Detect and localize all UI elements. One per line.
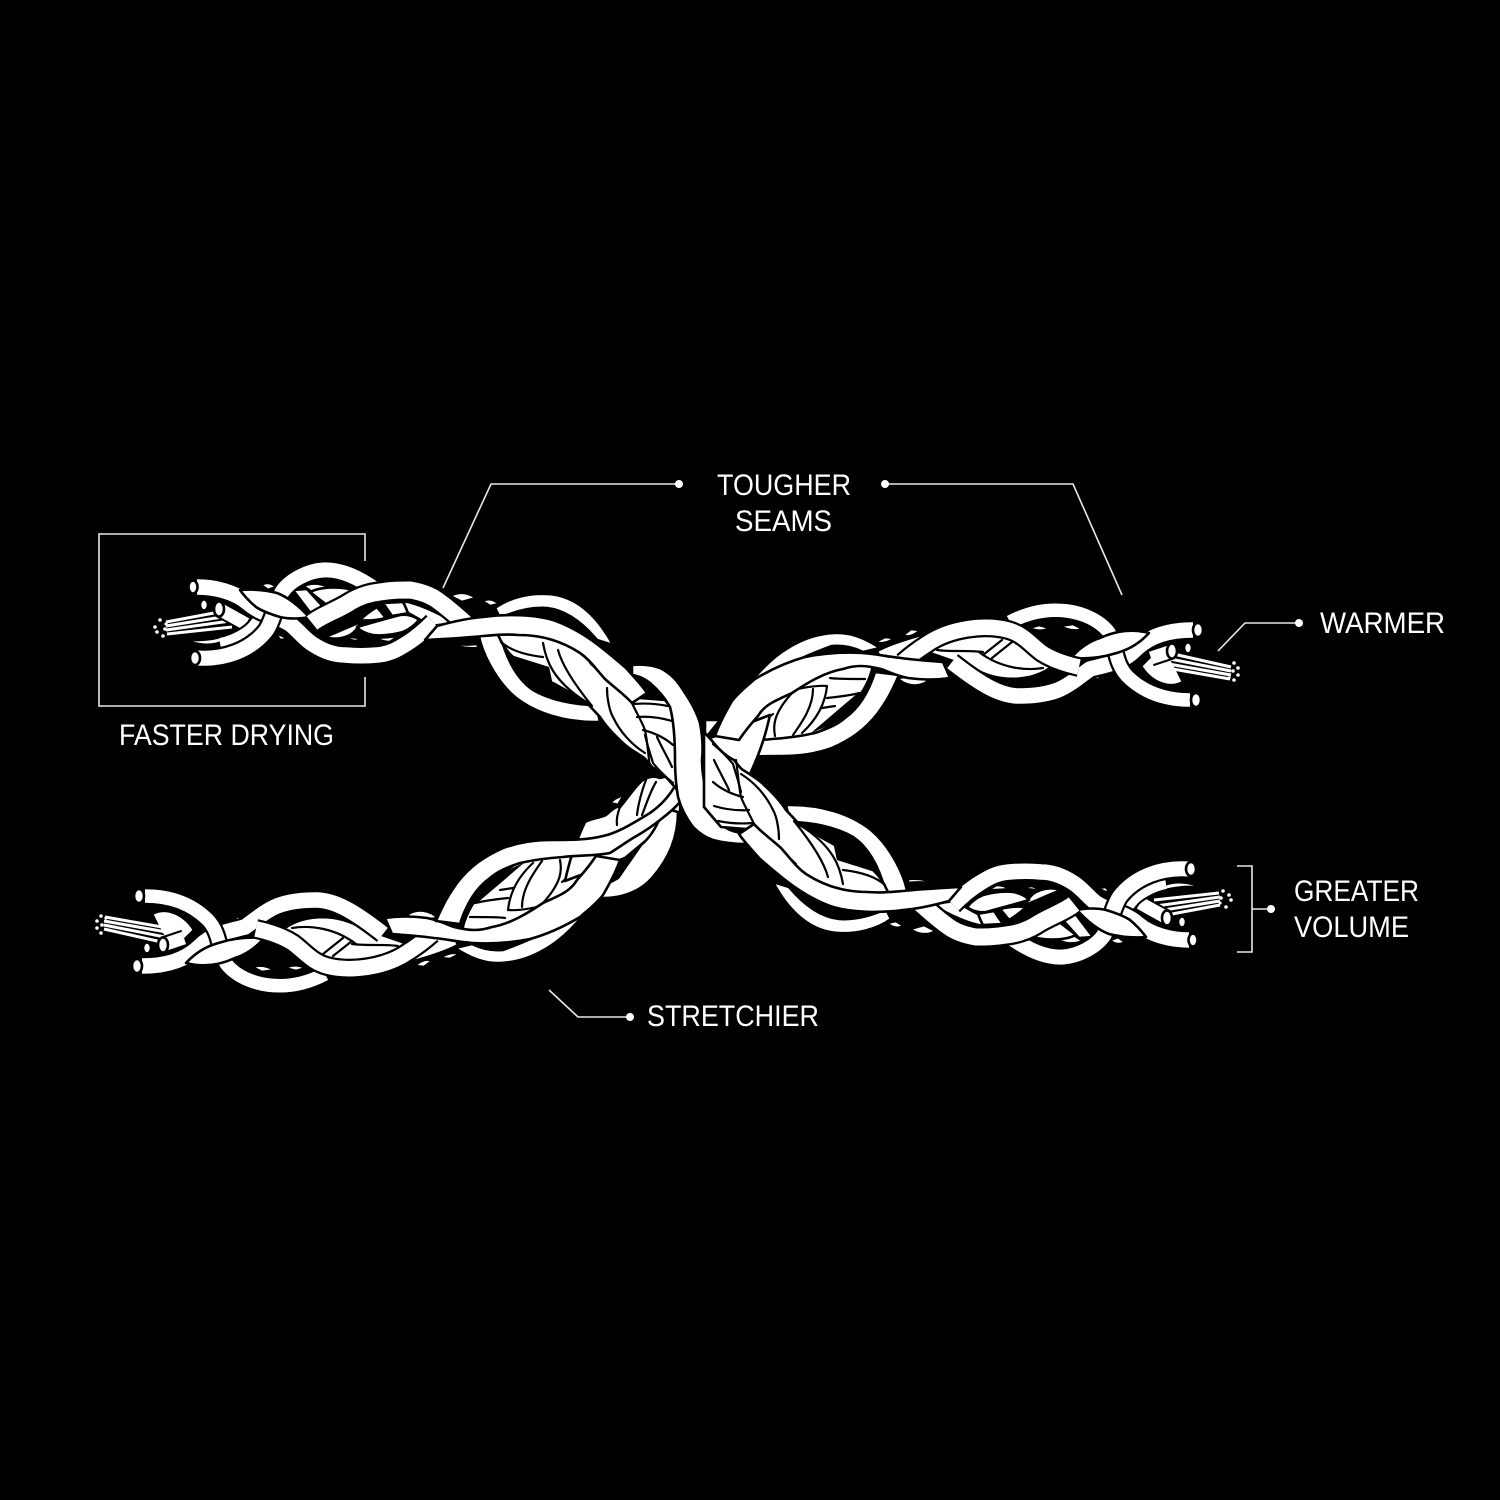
label: greater volume	[1294, 875, 1419, 944]
callout: stretchier leader	[549, 990, 634, 1021]
central S-shaped strand	[632, 665, 746, 844]
label: faster drying: FASTER DRYING	[119, 719, 334, 752]
label: stretchier: STRETCHIER	[647, 1000, 819, 1033]
label: greater volume: GREATER	[1294, 875, 1419, 908]
callout: tougher seams left leader	[443, 480, 683, 588]
label: tougher seams	[717, 469, 851, 538]
label: greater volume: VOLUME	[1294, 911, 1409, 944]
lower-right rope core and main strand	[704, 732, 961, 912]
upper-left main strand	[425, 615, 647, 703]
callout: faster drying bracket	[99, 534, 365, 706]
callout: greater volume bracket	[1237, 866, 1275, 952]
label: tougher seams: TOUGHER	[717, 469, 851, 502]
small strand stub at centre	[705, 720, 720, 735]
callout: warmer leader	[1218, 619, 1303, 651]
callout: tougher seams right leader	[881, 480, 1122, 595]
upper-left yarn arm	[153, 570, 682, 795]
label: tougher seams: SEAMS	[735, 505, 832, 538]
upper-right yarn arm	[712, 604, 1240, 772]
lower-left yarn arm	[95, 772, 682, 986]
label: warmer: WARMER	[1320, 607, 1445, 640]
lower-right yarn arm	[773, 805, 1233, 957]
